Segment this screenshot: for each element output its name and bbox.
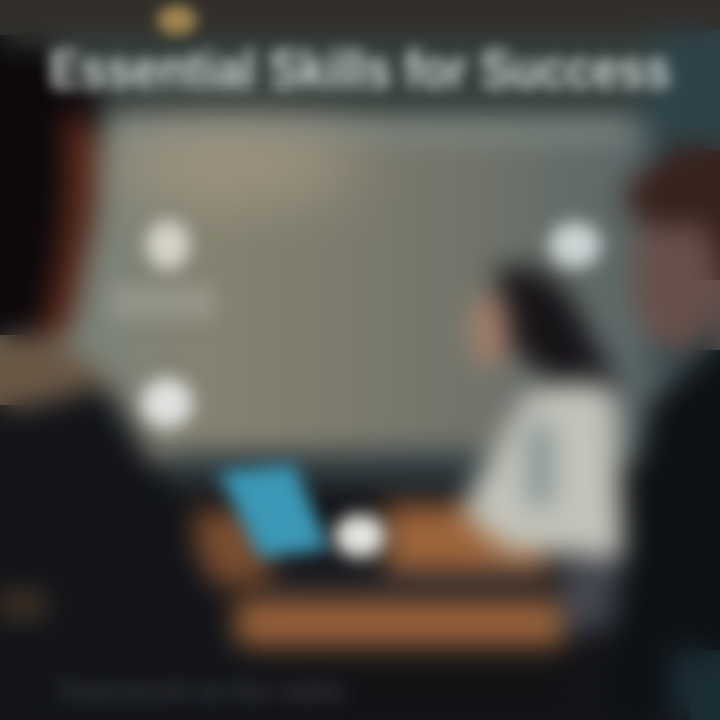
table — [150, 486, 580, 720]
warm wall glow — [110, 130, 360, 200]
icon: glowing dot lower left — [141, 378, 193, 428]
background wall — [0, 0, 720, 464]
woman seated — [460, 266, 630, 630]
icon: glowing dot upper right — [549, 222, 601, 268]
floor and wall base shadow — [170, 452, 500, 486]
man at right — [600, 144, 720, 720]
label below upper left dot — [110, 285, 215, 320]
ceiling light — [157, 5, 197, 35]
footer caption: Teamwork at the table — [55, 676, 345, 706]
man at left, foreground — [0, 44, 255, 720]
icon: glowing dot upper left — [146, 220, 190, 270]
laptop screen — [218, 464, 330, 558]
coffee cup — [334, 514, 386, 558]
